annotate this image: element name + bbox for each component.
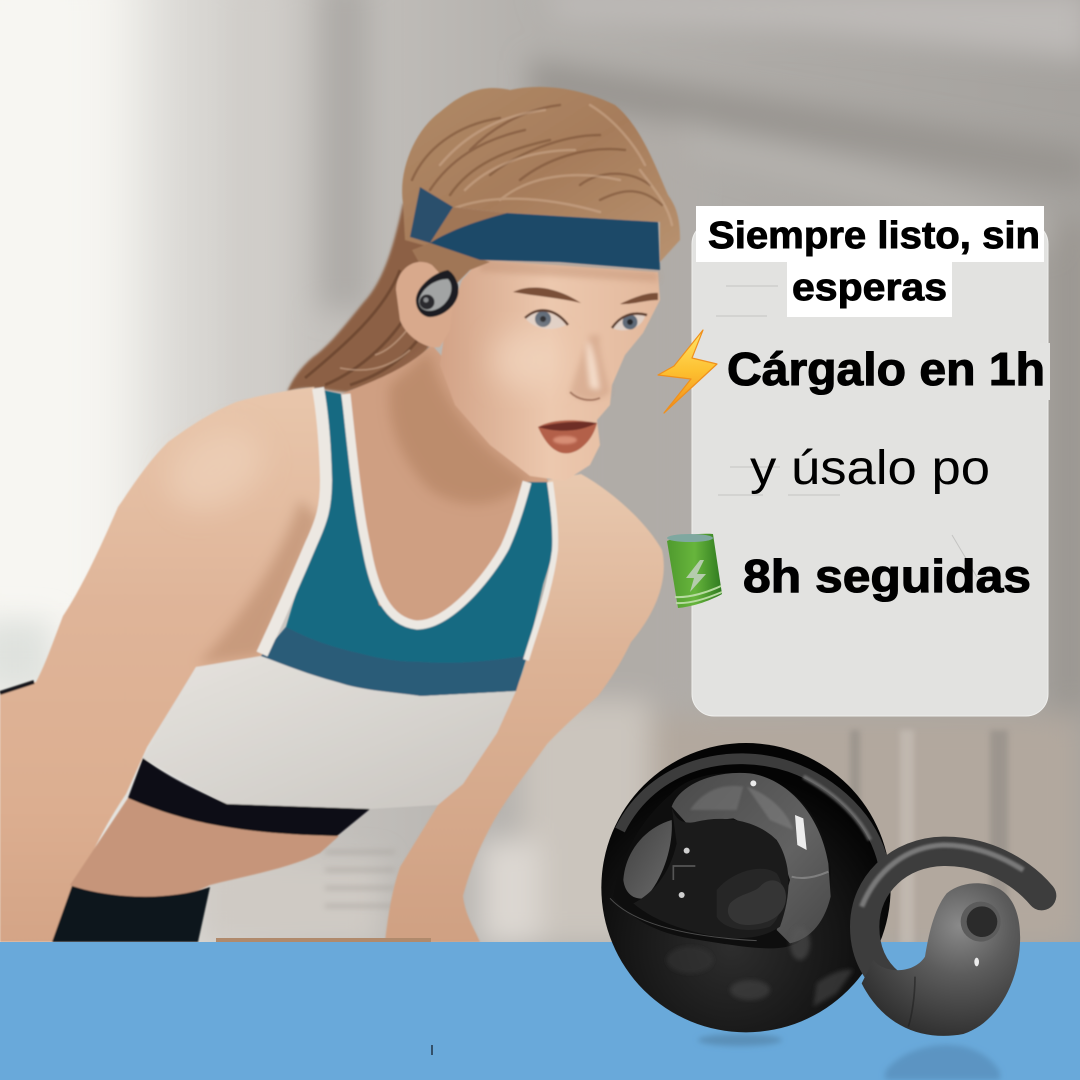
ear <box>396 262 455 347</box>
heading: Siempre listo, sin <box>708 215 1040 257</box>
white highlight: first line <box>696 206 1044 262</box>
left lobe <box>623 820 672 899</box>
panel right edge patch <box>1040 343 1050 400</box>
lower body reflections <box>667 927 853 1007</box>
hair strands <box>412 105 672 225</box>
line: charge time: Cárgalo en 1h <box>727 343 1045 395</box>
glass reflections <box>690 780 828 878</box>
charging case <box>601 743 891 1032</box>
icon: green battery <box>667 534 722 608</box>
speaker port <box>961 902 1001 942</box>
cheek shine <box>490 330 560 390</box>
bean cushion <box>728 880 786 925</box>
neck shadow <box>389 350 530 504</box>
icon: lightning bolt <box>658 330 717 413</box>
heading: esperas <box>792 267 947 309</box>
eyes <box>525 310 647 330</box>
heading <box>708 215 1040 309</box>
black shorts <box>52 886 210 942</box>
transparent glass <box>672 773 831 943</box>
armpit shadow <box>198 500 320 664</box>
hook highlight <box>862 845 1023 907</box>
face <box>440 260 660 481</box>
hair top <box>402 87 680 262</box>
left mark <box>673 866 695 880</box>
nose <box>570 335 610 400</box>
teal top <box>261 390 556 696</box>
hair behind the neck <box>287 203 450 392</box>
earbud cavity <box>633 807 788 938</box>
forehead shade <box>480 258 658 282</box>
earbud body <box>862 883 1020 1036</box>
case top rim <box>620 759 883 863</box>
line: battery time: 8h seguidas <box>743 550 1031 602</box>
left arm and shoulder <box>0 387 335 942</box>
hair side lock <box>412 207 507 300</box>
white highlight: second line <box>787 262 952 317</box>
headband flap <box>410 187 453 243</box>
rim light line <box>610 898 757 941</box>
right arm and shoulder <box>385 474 664 942</box>
text panel <box>692 206 1050 716</box>
panel stray lines <box>716 286 977 577</box>
body highlight <box>974 958 979 966</box>
lid <box>613 773 831 948</box>
white sports top <box>143 656 516 809</box>
neck and chest <box>342 345 555 630</box>
earbud <box>862 845 1042 1036</box>
headband <box>430 213 660 270</box>
woman athlete <box>0 87 680 942</box>
white trim <box>262 388 555 660</box>
product shadows on table <box>698 1034 1000 1080</box>
blue table band <box>0 938 1080 1080</box>
line: connector: y úsalo po <box>750 442 990 495</box>
lips <box>538 420 597 453</box>
black waist band <box>128 758 370 836</box>
earbud on ear <box>416 270 458 317</box>
eyebrows <box>513 287 658 304</box>
cavity inner <box>717 869 782 930</box>
body facet <box>908 977 915 1027</box>
bare waist <box>70 798 339 900</box>
shoulder highlight <box>154 415 276 525</box>
charging pins <box>679 848 690 898</box>
black strap far left <box>0 682 34 693</box>
mesh strip <box>261 627 526 696</box>
ear hook <box>865 851 1042 983</box>
